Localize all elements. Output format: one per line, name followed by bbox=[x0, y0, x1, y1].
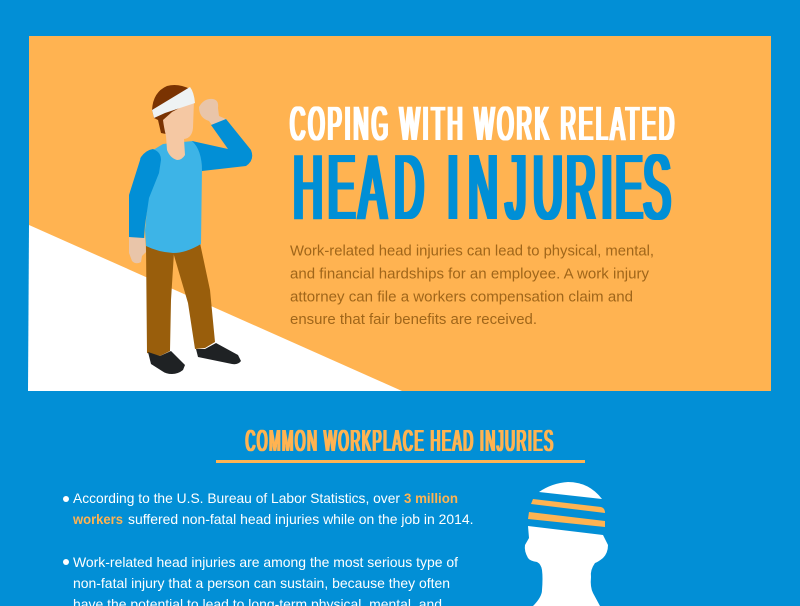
head bandage bbox=[152, 87, 195, 118]
trousers bbox=[146, 243, 215, 356]
icon: head silhouette with headband bbox=[525, 482, 608, 606]
head and neck silhouette bbox=[525, 526, 608, 606]
title line 1: COPING WITH WORK RELATED bbox=[290, 96, 674, 150]
bullet dot 2 bbox=[63, 559, 69, 565]
hero intro text bbox=[290, 244, 654, 328]
face and neck bbox=[163, 100, 194, 160]
intro line 2: and financial hardships for an employee. A work injury bbox=[290, 266, 650, 282]
section heading text: COMMON WORKPLACE HEAD INJURIES bbox=[246, 424, 553, 459]
right shoe bbox=[196, 343, 241, 364]
hero white diagonal wedge bbox=[28, 225, 402, 391]
intro line 4: ensure that fair benefits are received. bbox=[290, 312, 537, 328]
head dome bbox=[539, 482, 602, 499]
shirt torso bbox=[140, 141, 202, 253]
right raised arm sleeve bbox=[192, 119, 252, 171]
bullet 2 line 2: non-fatal injury that a person can sustain, because they often bbox=[73, 575, 450, 591]
highlight: workers: workers bbox=[72, 511, 123, 527]
right trouser leg bbox=[173, 243, 215, 349]
section heading underline bbox=[216, 460, 585, 463]
panel: hero bbox=[28, 36, 771, 391]
bullet 1 line 1: According to the U.S. Bureau of Labor Statistics, over bbox=[73, 490, 400, 506]
left arm sleeve bbox=[129, 149, 161, 238]
headband stripe 1 bbox=[531, 499, 605, 513]
title line 2: HEAD INJURIES bbox=[293, 136, 671, 240]
bullet list bbox=[63, 490, 474, 606]
left hand bbox=[129, 237, 146, 263]
illustration: injured man with bandaged head bbox=[129, 85, 252, 374]
highlight: 3 million: 3 million bbox=[404, 490, 458, 506]
bullet 2 line 1: Work-related head injuries are among the most serious type of bbox=[73, 554, 458, 570]
bullet 1 bbox=[63, 490, 474, 527]
hero orange background bbox=[29, 36, 771, 391]
hero title bbox=[290, 96, 674, 240]
intro line 1: Work-related head injuries can lead to physical, mental, bbox=[290, 244, 654, 260]
bullet 1 line 2: suffered non-fatal head injuries while on the job in 2014. bbox=[128, 511, 474, 527]
intro line 3: attorney can file a workers compensation claim and bbox=[290, 290, 633, 306]
headband stripe 2 bbox=[528, 512, 605, 527]
back hair bbox=[152, 85, 190, 134]
section heading bbox=[216, 424, 585, 463]
left shoe bbox=[148, 351, 185, 374]
bullet 2 bbox=[63, 554, 458, 606]
raised fist and wrist bbox=[199, 99, 226, 128]
left trouser leg bbox=[146, 245, 174, 356]
bullet dot 1 bbox=[63, 496, 69, 502]
